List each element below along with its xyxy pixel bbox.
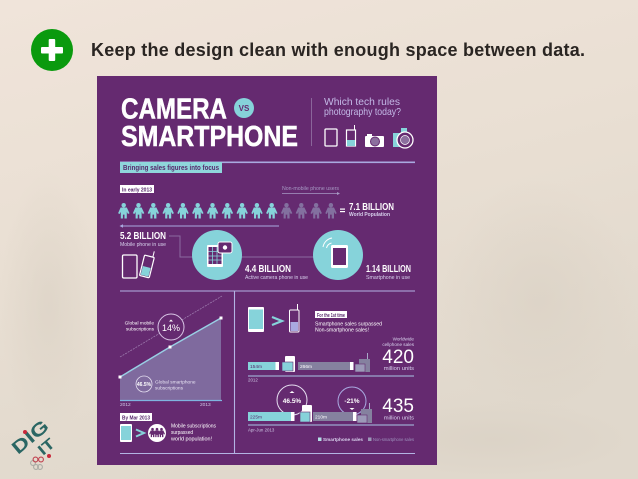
legend [318, 437, 415, 442]
section heading: sales figures: Bringing sales figures into focus [123, 165, 219, 172]
stat: mobile phones: 5.2 BILLION [120, 231, 166, 242]
callout: global mobile 14%: 14% [162, 323, 180, 333]
legend: Non-smartphone sales [373, 437, 415, 442]
text: mobile subscriptions surpassed [170, 424, 216, 442]
stat: camera phones [245, 264, 308, 281]
stat: 420 million units: Worldwide [393, 336, 414, 342]
area chart: subscriptions: 2012 [120, 402, 131, 408]
subtitle [311, 96, 401, 146]
connector lines [169, 236, 316, 257]
stat: 420 million units [382, 336, 415, 372]
bar row: apr-jun 2013: -21% [344, 398, 360, 405]
bar row: 2012 [248, 353, 414, 382]
bar row: apr-jun 2013: 225m [250, 414, 262, 420]
icon: green plus [31, 29, 73, 71]
icon: smartphone circle [313, 230, 363, 280]
stat: 435 million units: 435 [382, 396, 414, 417]
stat: world population: 7.1 BILLION [349, 202, 394, 213]
callout: global smartphone 46.5%: Global smartphone [155, 380, 196, 386]
bar row: 2012: 154m [250, 364, 262, 370]
heading: Keep the design clean with enough space between data. [91, 40, 585, 60]
section rules [120, 291, 415, 454]
icon: tablet and phone [122, 249, 156, 278]
text: mobile subscriptions surpassed: Mobile subscriptions [171, 424, 216, 430]
legend: Smartphone sales [323, 437, 363, 442]
callout: global smartphone 46.5%: subscriptions [155, 386, 184, 392]
title: SMARTPHONE [121, 121, 298, 153]
stat: 420 million units: million units [384, 366, 414, 372]
bar row: apr-jun 2013: 46.5% [283, 398, 301, 405]
callout: global smartphone 46.5%: 46.5% [137, 382, 152, 388]
stat: mobile phones [120, 231, 166, 248]
bar row: 2012: 266m [300, 364, 312, 370]
tag: in early 2013 [120, 185, 154, 193]
title [121, 94, 298, 153]
logo: dig it [8, 416, 59, 469]
logo: dig it: DIG [8, 416, 53, 458]
panel: infographic [97, 76, 437, 465]
logo: dig it: IT [35, 435, 59, 459]
subtitle: Which tech rules [324, 96, 400, 108]
stat: 420 million units: cellphone sales [382, 342, 415, 347]
callout: for the first time: Non-smartphone sales! [315, 328, 369, 334]
icon: tablet greater than people [120, 424, 166, 442]
callout: for the first time: For the 1st time [317, 313, 345, 319]
callout: global smartphone 46.5% [136, 376, 196, 392]
bar row: apr-jun 2013: 210m [315, 414, 327, 420]
stat: 435 million units: million units [384, 416, 414, 422]
stat: smartphones: 1.14 BILLION [366, 264, 411, 275]
subtitle: photography today? [324, 106, 401, 118]
stat: world population: World Population [349, 212, 391, 218]
title: CAMERA [121, 94, 227, 126]
bar row: apr-jun 2013 [248, 385, 414, 432]
tag: by mar 2013: By Mar 2013 [122, 415, 151, 421]
stat: smartphones: Smartphone in use [366, 275, 410, 281]
label: non-mobile phone users [282, 186, 340, 195]
label: non-mobile phone users: Non-mobile phone users [282, 186, 339, 192]
vs badge [234, 98, 254, 118]
callout: global mobile 14% [125, 314, 184, 340]
stat: mobile phones: Mobile phone in use [120, 242, 166, 248]
icon: camera phone circle [192, 230, 242, 280]
callout: global mobile 14%: subscriptions [126, 326, 155, 332]
text: mobile subscriptions surpassed: surpassed [171, 430, 193, 436]
bar row: 2012: 2012 [248, 378, 258, 382]
callout: for the first time [315, 311, 382, 334]
arrow: mobile phone users [120, 224, 279, 228]
vs badge: VS [239, 104, 250, 113]
tag: by mar 2013 [120, 413, 152, 421]
tag: in early 2013: In early 2013 [122, 187, 153, 193]
stat: smartphones [366, 264, 411, 281]
area chart: subscriptions: 2013 [200, 402, 211, 408]
bar row: apr-jun 2013: Apr-Jun 2013 [248, 428, 275, 432]
callout: for the first time: Smartphone sales surpassed [315, 322, 382, 328]
text: mobile subscriptions surpassed: world population! [170, 436, 212, 442]
stat: world population [340, 202, 394, 218]
icon row: devices [325, 125, 413, 148]
area chart: subscriptions [118, 296, 222, 408]
icon: tablet greater than phone [248, 304, 299, 332]
callout: global mobile 14%: Global mobile [125, 320, 154, 326]
stat: 420 million units: 420 [382, 347, 414, 368]
stat: camera phones: 4.4 BILLION [245, 264, 291, 275]
stat: camera phones: Active camera phone in use [245, 275, 308, 281]
pictogram: people [118, 203, 337, 218]
section heading: sales figures [120, 162, 415, 173]
